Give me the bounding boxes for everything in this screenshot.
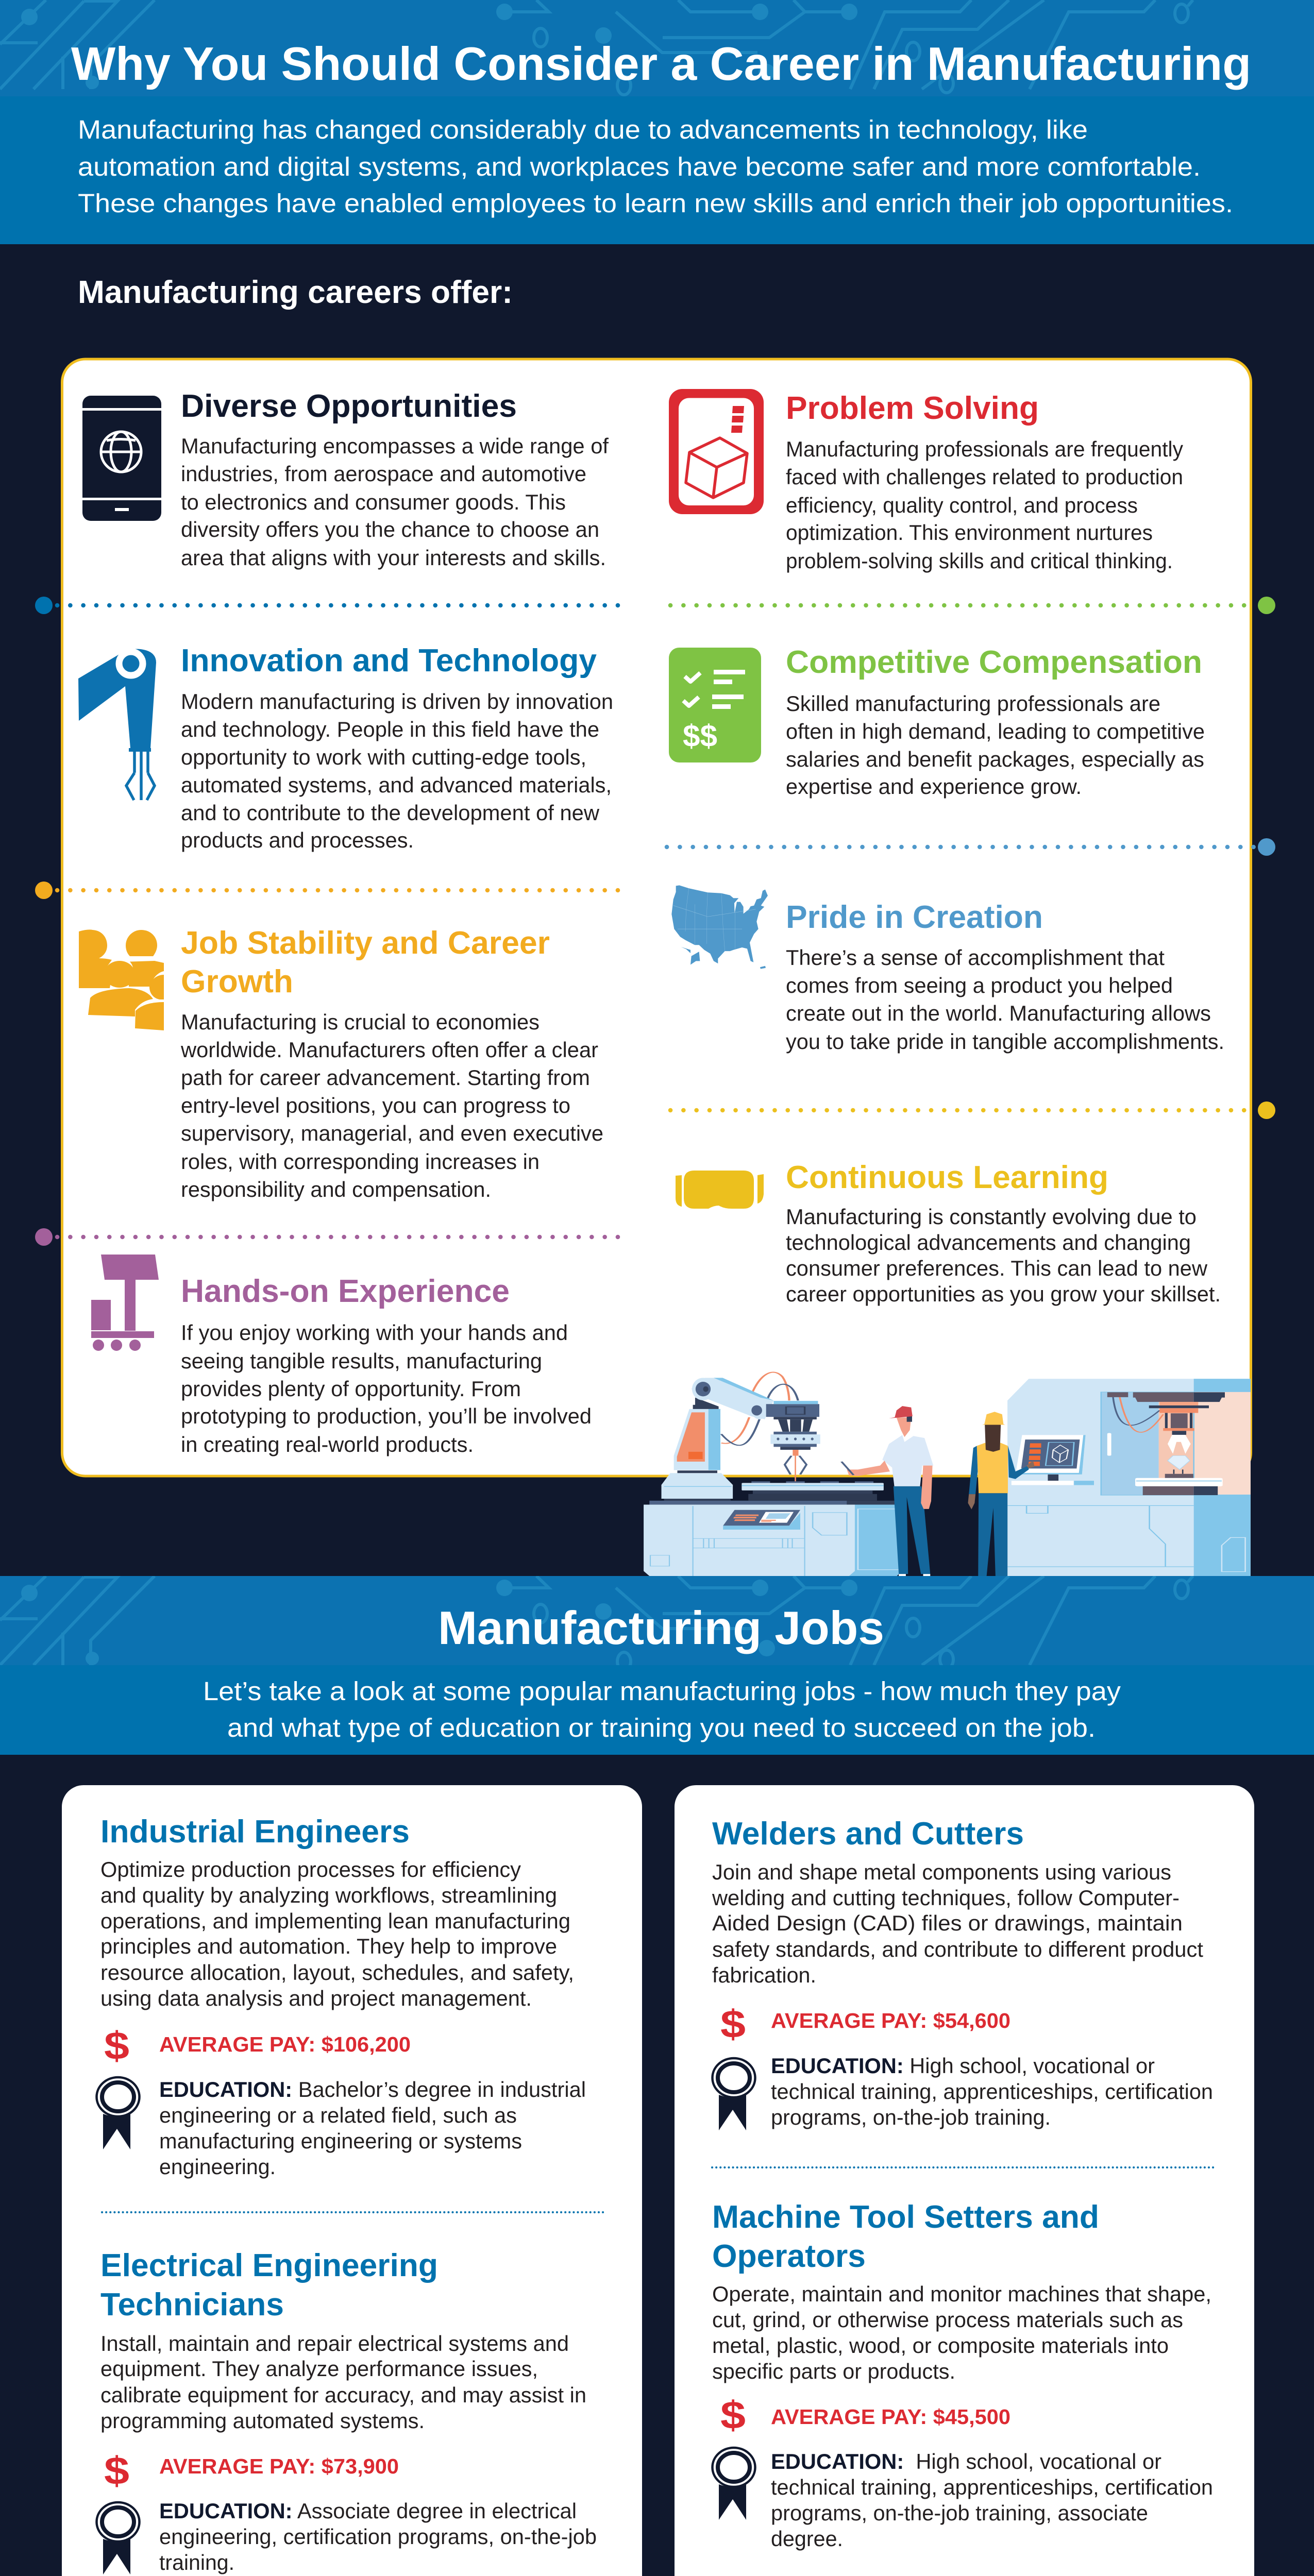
description: cut, grind, or otherwise process materials such as [712,2308,1183,2332]
body text: automated systems, and advanced materials, [181,773,612,797]
body text: Modern manufacturing is driven by innovation [181,689,613,714]
body text: Manufacturing encompasses a wide range of [181,434,609,458]
body text: problem-solving skills and critical thinking. [786,549,1173,573]
education [771,2449,1213,2551]
body text [786,1205,1221,1306]
body text: consumer preferences. This can lead to new [786,1256,1208,1280]
panel: hands-on experience [91,1255,592,1456]
icon: green checklist [669,648,761,762]
education: programs, on-the-job training. [771,2105,1051,2129]
education: EDUCATION: High school, vocational or [771,2449,1161,2473]
body text: comes from seeing a product you helped [786,973,1173,997]
icon: map of the United States [671,885,768,969]
education: training. [159,2550,234,2574]
body text: Skilled manufacturing professionals are [786,691,1160,716]
heading: Continuous Learning [786,1160,1108,1195]
intro text [78,115,1233,218]
job: welders and cutters [712,1816,1213,2130]
heading: Electrical Engineering [100,2248,438,2283]
job: machine tool setters and operators [712,2199,1213,2551]
heading: Operators [712,2239,866,2274]
education: engineering or a related field, such as [159,2103,517,2127]
panel: diverse opportunities [82,388,609,570]
icon: headset [676,1171,764,1209]
icon: dollar sign: $ [104,2449,129,2493]
intro text [203,1676,1121,1742]
body text [786,691,1205,799]
heading: Welders and Cutters [712,1816,1024,1852]
body text: Manufacturing is crucial to economies [181,1010,540,1034]
body text [786,437,1183,573]
job: electrical engineering technicians [97,2248,597,2574]
body text: entry-level positions, you can progress to [181,1093,570,1117]
body text: If you enjoy working with your hands and [181,1320,568,1345]
panel: job stability and career growth [79,925,603,1201]
body text [181,1320,592,1456]
heading: Industrial Engineers [100,1814,410,1850]
education: technical training, apprenticeships, certification [771,2079,1213,2104]
education: technical training, apprenticeships, certification [771,2475,1213,2499]
body text: and to contribute to the development of new [181,801,600,825]
intro text: These changes have enabled employees to learn new skills and enrich their job opportunities. [78,189,1233,218]
heading: Diverse Opportunities [181,388,517,424]
icon: phone with globe [82,396,161,521]
average pay: AVERAGE PAY: $73,900 [159,2454,399,2478]
body text: diversity offers you the chance to choose an [181,517,599,541]
education: degree. [771,2527,843,2551]
panel: jobs left card [62,1785,642,2576]
panel: innovation and technology [78,643,613,852]
body text: salaries and benefit packages, especially as [786,747,1204,771]
body text: create out in the world. Manufacturing allows [786,1001,1211,1025]
description: metal, plastic, wood, or composite materials into [712,2333,1169,2358]
icon: ribbon [97,2502,139,2574]
heading [712,2199,1099,2274]
description: Join and shape metal components using various [712,1860,1171,1884]
description: Operate, maintain and monitor machines that shape, [712,2282,1211,2306]
body text: opportunity to work with cutting-edge tools, [181,745,586,769]
body text: There’s a sense of accomplishment that [786,945,1165,970]
average pay: AVERAGE PAY: $106,200 [159,2032,411,2056]
body text: products and processes. [181,828,414,852]
body text: supervisory, managerial, and even executive [181,1121,603,1145]
heading: Problem Solving [786,391,1039,426]
heading: Technicians [100,2287,284,2323]
illustration: robot arm, workers and machines [644,1372,1251,1576]
icon: red box [669,389,764,514]
heading: Manufacturing Jobs [438,1602,884,1654]
body text: and technology. People in this field have the [181,717,599,741]
description: welding and cutting techniques, follow Computer- [712,1886,1180,1910]
intro text: Manufacturing has changed considerably due to advancements in technology, like [78,115,1088,144]
panel: problem solving [669,389,1183,573]
body text: Manufacturing is constantly evolving due to [786,1205,1197,1229]
icon: robot arm [78,649,156,800]
education: EDUCATION: Associate degree in electrical [159,2499,577,2523]
subheading: careers offer: Manufacturing careers offer: [78,275,513,310]
icon: dollar sign: $ [720,2003,746,2046]
panel: continuous learning [676,1160,1221,1306]
description [712,1860,1203,1987]
icon: ribbon [97,2077,139,2149]
body text [786,945,1224,1054]
description: fabrication. [712,1963,816,1987]
education: engineering, certification programs, on-the-job [159,2524,597,2549]
body text: industries, from aerospace and automotive [181,462,586,486]
band: manufacturing jobs header [0,1576,1314,1755]
education: engineering. [159,2155,276,2179]
body text: roles, with corresponding increases in [181,1149,540,1174]
description: safety standards, and contribute to different product [712,1937,1203,1961]
education [771,2054,1213,2129]
description: calibrate equipment for accuracy, and may assist in [100,2383,586,2407]
body text: area that aligns with your interests and skills. [181,546,606,570]
heading: Machine Tool Setters and [712,2199,1099,2235]
heading: Growth [181,964,293,999]
body text: responsibility and compensation. [181,1177,491,1201]
body text: faced with challenges related to production [786,465,1183,489]
education: EDUCATION: Bachelor’s degree in industrial [159,2077,586,2102]
description: Optimize production processes for efficiency [100,1857,521,1882]
body text: you to take pride in tangible accomplishments. [786,1029,1224,1054]
heading: Innovation and Technology [181,643,597,679]
job: industrial engineers [97,1814,586,2179]
icon: dollar sign: $ [720,2394,746,2437]
panel: jobs right card [675,1785,1254,2576]
description: equipment. They analyze performance issues, [100,2357,538,2381]
description: Aided Design (CAD) files or drawings, maintain [712,1911,1183,1935]
heading [181,925,550,999]
description [100,1857,574,2010]
body text: worldwide. Manufacturers often offer a clear [180,1038,598,1062]
intro text: and what type of education or training you need to succeed on the job. [227,1713,1096,1742]
average pay: AVERAGE PAY: $45,500 [771,2405,1010,2429]
body text [181,434,609,570]
description: operations, and implementing lean manufacturing [100,1909,570,1933]
body text: career opportunities as you grow your skillset. [786,1282,1221,1306]
body text: provides plenty of opportunity. From [181,1377,521,1401]
body text: expertise and experience grow. [786,774,1082,799]
description: principles and automation. They help to improve [100,1934,557,1958]
body text: path for career advancement. Starting from [181,1065,590,1090]
body text [181,689,613,852]
body text: prototyping to production, you’ll be involved [181,1404,592,1428]
body text: to electronics and consumer goods. This [181,490,566,514]
description: using data analysis and project management. [100,1986,532,2010]
body text: Manufacturing professionals are frequently [786,437,1183,461]
panel: competitive compensation [669,645,1205,799]
title: Why You Should Consider a Career in Manufacturing [71,38,1251,90]
body text: efficiency, quality control, and process [786,493,1138,517]
description: programming automated systems. [100,2409,425,2433]
icon: ribbon [712,2448,755,2520]
description: resource allocation, layout, schedules, and safety, [100,1960,574,1985]
panel: pride in creation [671,885,1224,1054]
heading: Job Stability and Career [181,925,550,961]
education: EDUCATION: High school, vocational or [771,2054,1155,2078]
icon: ribbon [712,2058,755,2130]
heading: Hands-on Experience [181,1274,510,1309]
description [712,2282,1211,2383]
heading [100,2248,438,2323]
dotted dividers [35,597,1275,1246]
body text: seeing tangible results, manufacturing [181,1349,542,1373]
education [159,2499,597,2574]
icon: group of people [79,929,164,1030]
body text: in creating real-world products. [181,1432,474,1456]
icon: dollar sign: $ [104,2024,129,2068]
description: and quality by analyzing workflows, streamlining [100,1883,557,1907]
icon: green checklist: $$ [683,719,717,753]
intro text: Let’s take a look at some popular manufacturing jobs - how much they pay [203,1676,1121,1706]
panel: careers offer card [62,359,1251,1476]
body text: optimization. This environment nurtures [786,520,1153,545]
body text [180,1010,603,1201]
header band [0,0,1314,244]
education: manufacturing engineering or systems [159,2129,522,2153]
heading: Pride in Creation [786,900,1043,935]
icon: cart with press [91,1255,159,1351]
description: specific parts or products. [712,2359,955,2383]
body text: often in high demand, leading to competitive [786,719,1205,743]
education [159,2077,586,2179]
body text: technological advancements and changing [786,1230,1191,1255]
description [100,2331,586,2433]
intro text: automation and digital systems, and workplaces have become safer and more comfortable. [78,152,1201,181]
education: programs, on-the-job training, associate [771,2501,1148,2525]
description: Install, maintain and repair electrical systems and [100,2331,569,2355]
average pay: AVERAGE PAY: $54,600 [771,2009,1010,2032]
heading: Competitive Compensation [786,645,1202,680]
